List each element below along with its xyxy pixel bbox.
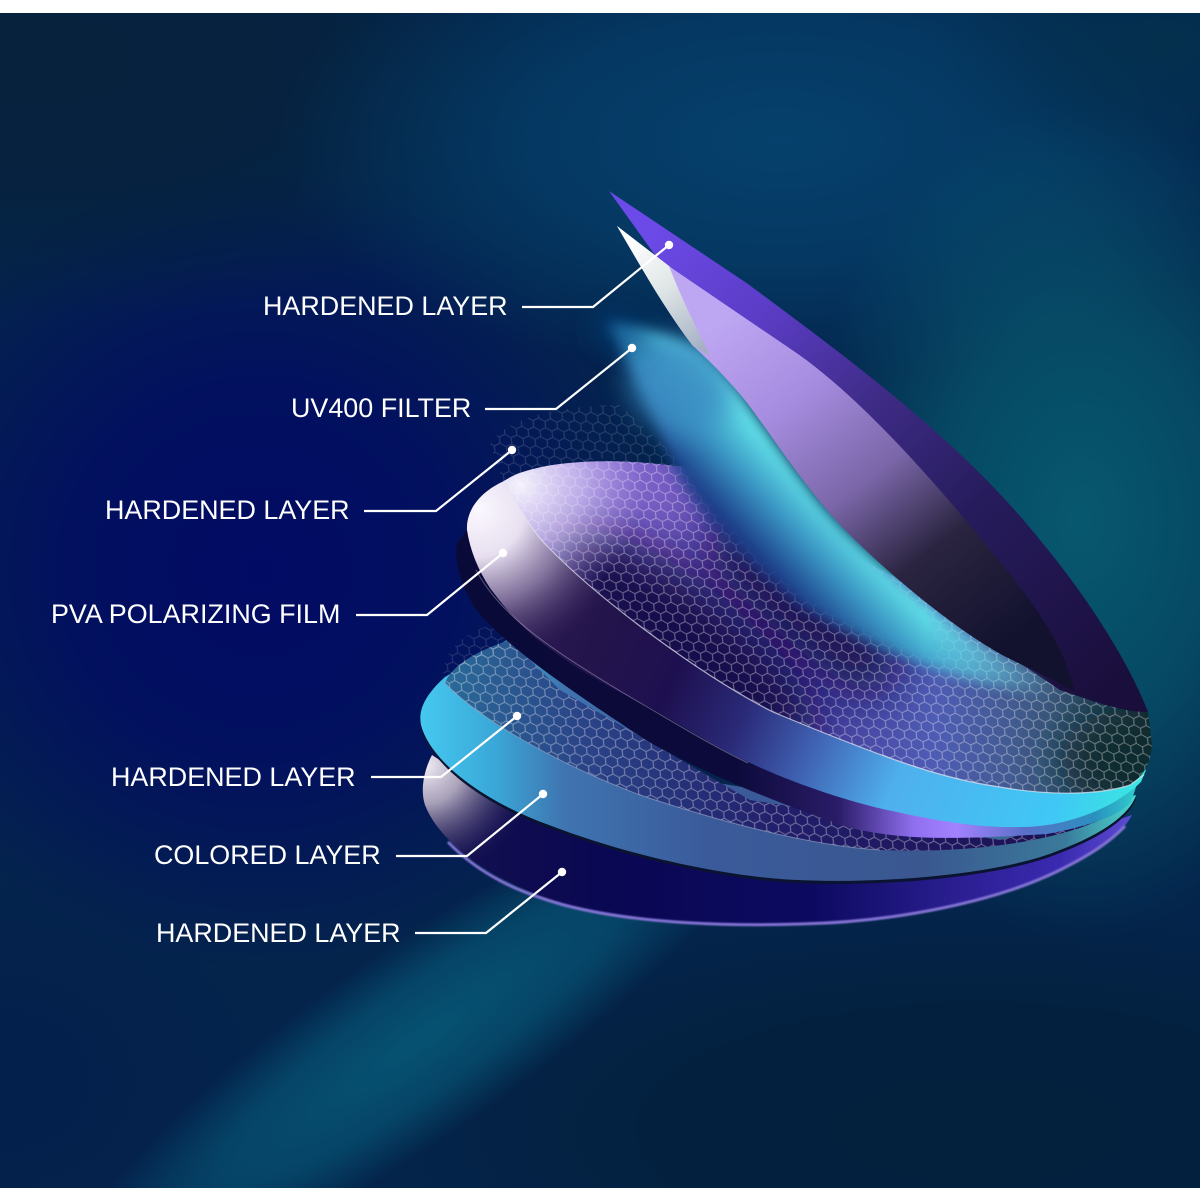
label: hardened layer 2: HARDENED LAYER	[105, 495, 350, 525]
label: hardened layer 4	[156, 868, 566, 948]
label: PVA polarizing film: PVA POLARIZING FILM	[51, 599, 340, 629]
label: hardened layer 1: HARDENED LAYER	[263, 291, 508, 321]
label: PVA polarizing film	[51, 549, 507, 629]
honeycomb hardened layer	[444, 627, 1100, 851]
white sheet tip	[617, 226, 710, 356]
label: hardened layer 3: HARDENED LAYER	[111, 762, 356, 792]
lens stack illustration	[420, 191, 1200, 925]
PVA lens body	[460, 470, 1146, 827]
PVA lens underside	[456, 481, 1151, 838]
label: hardened layer 4: HARDENED LAYER	[156, 918, 401, 948]
lens rim highlight	[504, 481, 1144, 793]
colored layer	[420, 638, 1136, 884]
honeycomb lens face	[504, 461, 1152, 794]
label: hardened layer 3	[111, 712, 521, 792]
label: colored layer	[154, 790, 547, 870]
lavender sheet	[617, 226, 1075, 692]
bottom hardened layer	[420, 750, 1132, 925]
label: UV400 filter: UV400 FILTER	[291, 393, 471, 423]
label: colored layer: COLORED LAYER	[154, 840, 381, 870]
ghost honeycomb above lens	[490, 405, 678, 481]
UV400 filter sheet	[588, 308, 1060, 692]
label: hardened layer 2	[105, 446, 516, 525]
label: hardened layer 1	[263, 241, 673, 321]
label: UV400 filter	[291, 344, 636, 423]
outer purple sheet	[609, 191, 1148, 712]
